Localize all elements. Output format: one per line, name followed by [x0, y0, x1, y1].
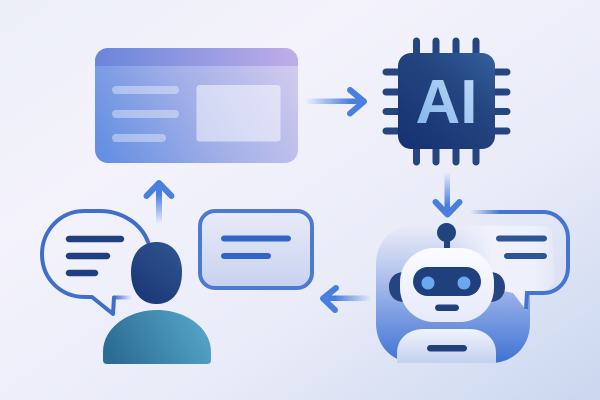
robot ears [389, 272, 505, 302]
person head [131, 242, 182, 304]
icon: person [103, 242, 211, 364]
arrow: person to window [146, 183, 172, 224]
icon: robot with speech bubble [376, 212, 568, 363]
person bubble text lines [69, 239, 121, 273]
panel: application window [95, 48, 298, 163]
icon: AI chip [386, 41, 507, 162]
person torso [103, 310, 211, 364]
robot speech bubble [450, 212, 568, 310]
robot antenna [437, 223, 456, 250]
arrow: window to AI chip [305, 90, 364, 114]
bubble tail fade [113, 296, 132, 300]
robot visor [413, 267, 481, 296]
robot eyes [422, 276, 470, 290]
bubble text lines [499, 238, 544, 256]
robot body [397, 329, 496, 363]
robot head [400, 248, 494, 322]
chip body [398, 53, 495, 149]
robot mouth [435, 304, 459, 311]
arrow: robot to reply bubble [323, 288, 371, 310]
window title bar [95, 48, 298, 66]
chip label: AI [416, 68, 478, 137]
chip pins [386, 41, 507, 162]
window text lines [112, 86, 179, 142]
robot background tile [376, 225, 530, 363]
reply text lines [224, 238, 288, 256]
robot chest line [427, 345, 467, 352]
reply message bubble [200, 211, 312, 288]
window image placeholder [196, 85, 280, 142]
arrow: AI chip to robot [436, 172, 460, 214]
person speech bubble [42, 211, 148, 314]
